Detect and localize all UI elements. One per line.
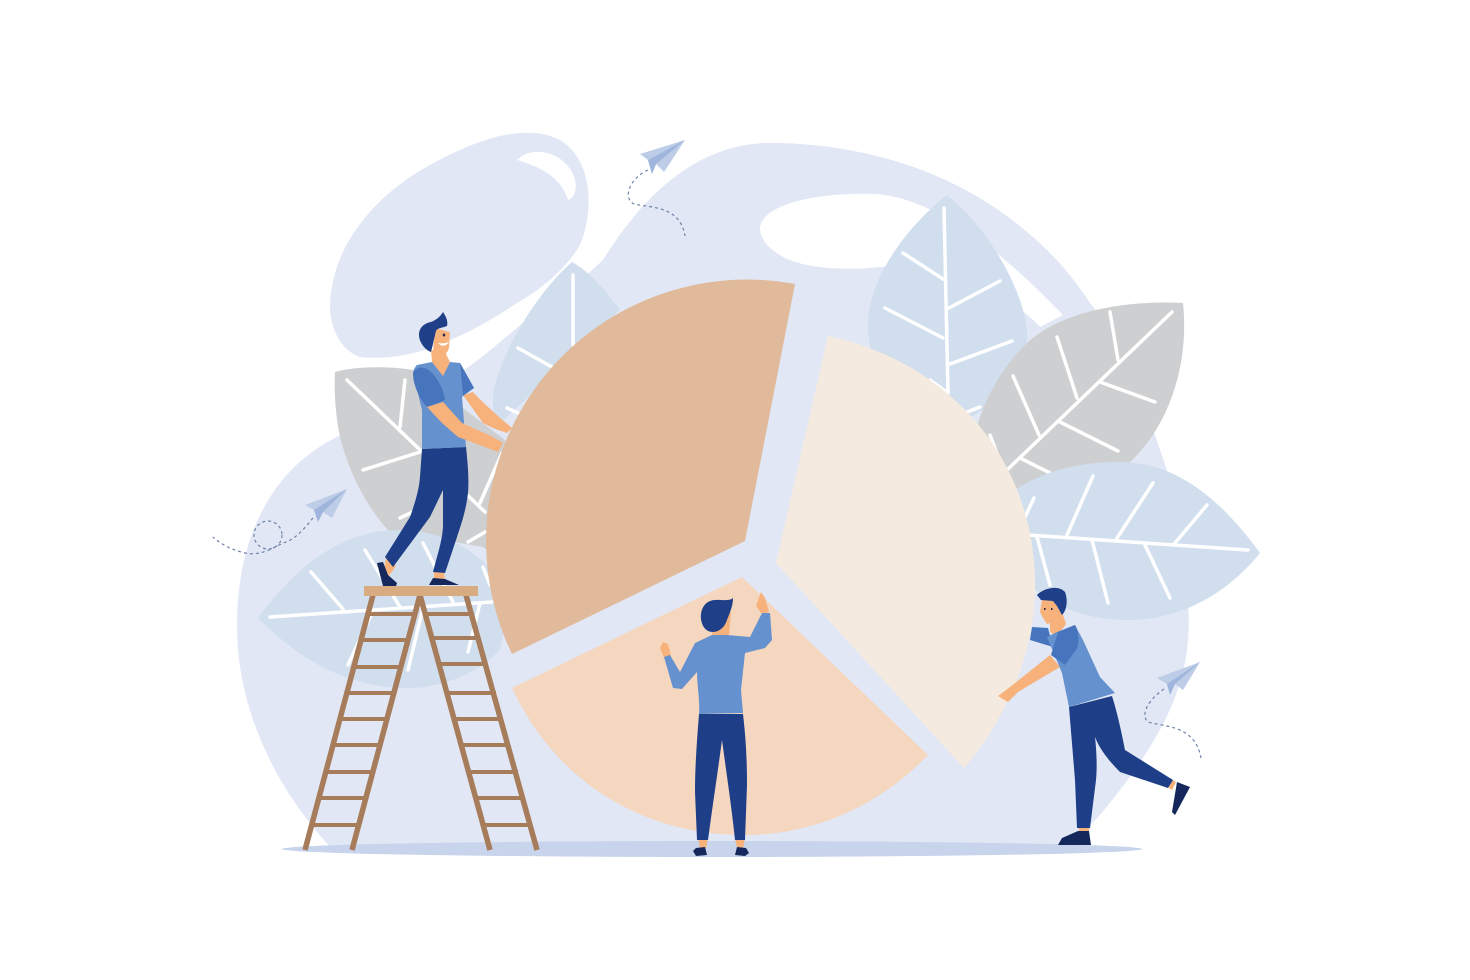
shoes — [377, 562, 459, 586]
leaf: left grey — [335, 367, 505, 560]
person: man on ladder — [377, 312, 512, 586]
hair — [1037, 588, 1067, 615]
leaf: right grey — [978, 302, 1184, 492]
leaf: right blue — [1015, 462, 1260, 620]
pie chart — [486, 280, 1035, 835]
ankles — [384, 558, 445, 580]
blob highlight — [760, 194, 1063, 327]
ankles — [1078, 778, 1176, 834]
pie slice: peach — [512, 577, 928, 835]
leaf: top right — [868, 195, 1027, 425]
neck — [712, 612, 731, 637]
hair — [701, 598, 733, 632]
ladder — [305, 586, 537, 850]
face — [1040, 600, 1062, 624]
ladder platform — [364, 586, 478, 596]
neck — [1050, 612, 1066, 636]
shirt — [664, 613, 772, 714]
shoes — [693, 847, 749, 856]
pie slice: cream — [776, 336, 1035, 768]
leaf: left blue — [258, 530, 510, 688]
egg highlight — [517, 152, 576, 200]
back sleeve — [1030, 627, 1053, 647]
eye — [443, 334, 445, 336]
neck — [431, 350, 450, 377]
trousers — [695, 714, 747, 840]
paper plane: left — [213, 489, 347, 554]
smile — [438, 342, 449, 346]
face — [433, 328, 450, 355]
trousers — [1069, 696, 1173, 828]
background blob — [237, 143, 1189, 852]
paper plane: top — [628, 140, 685, 236]
person: man pushing slice — [998, 588, 1190, 845]
ground shadow — [282, 841, 1142, 857]
hands — [660, 592, 769, 658]
sleeve — [1051, 625, 1078, 665]
shoes — [1058, 782, 1190, 845]
person: man in centre seen from behind — [660, 592, 772, 856]
eyes — [1044, 608, 1052, 610]
hair — [419, 312, 447, 352]
back arm — [463, 392, 512, 433]
ankles — [698, 838, 745, 848]
shirt — [1047, 625, 1115, 707]
trousers — [385, 447, 468, 573]
pie slice: large tan — [486, 280, 795, 654]
leaf: behind pie upper left — [493, 262, 620, 430]
shirt — [413, 362, 474, 449]
background egg shape — [330, 133, 589, 358]
arm — [998, 655, 1060, 702]
sleeves — [413, 363, 474, 407]
paper plane: right — [1145, 662, 1201, 758]
front arm — [427, 402, 503, 452]
